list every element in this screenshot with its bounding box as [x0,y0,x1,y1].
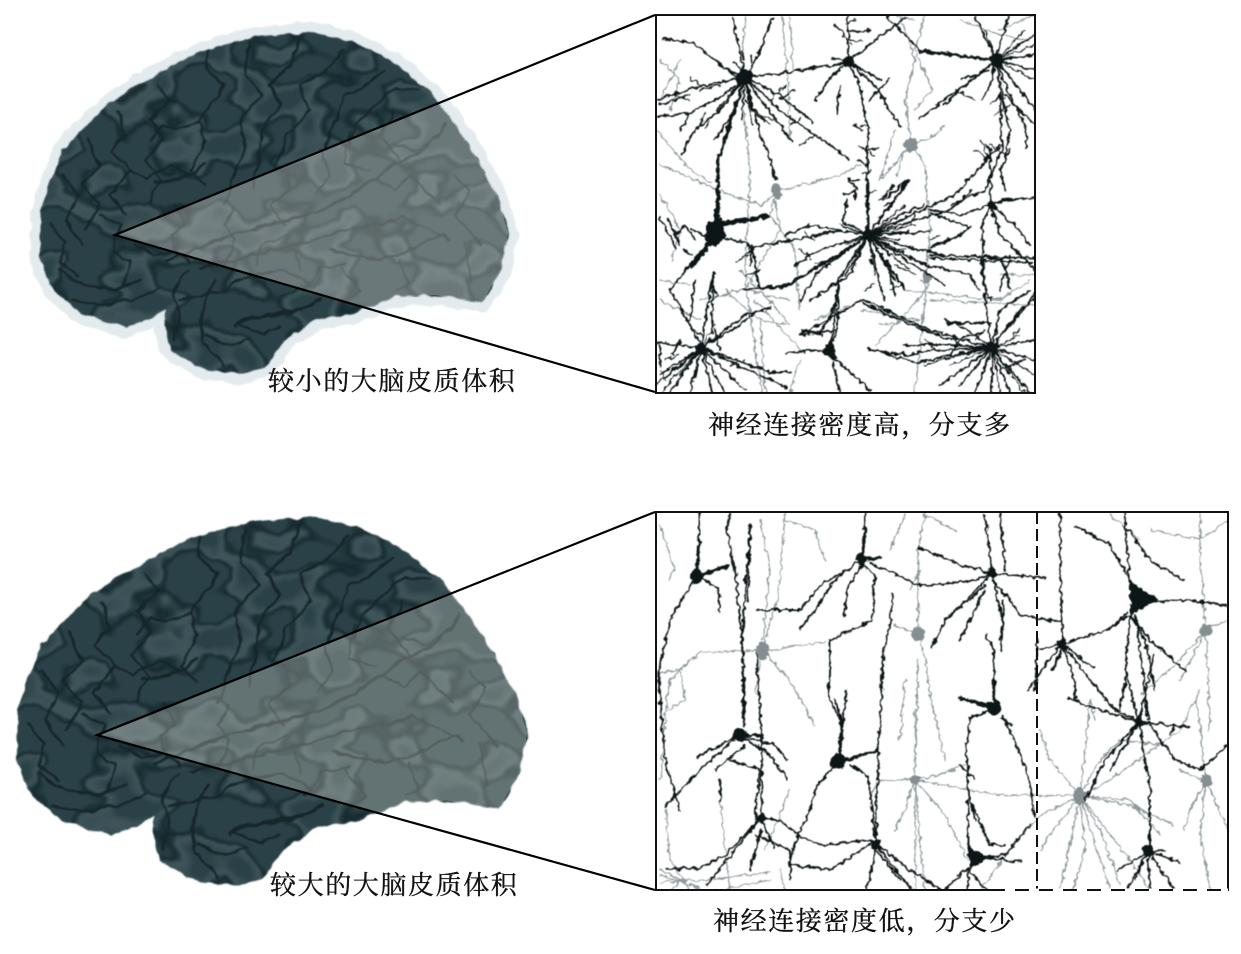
neuron top left [657,17,850,217]
neuron mid right [930,145,1035,300]
neuron lower left [656,280,790,393]
caption: sparse connections: 神经连接密度低，分支少 [713,907,1017,936]
panel frame [656,15,1035,393]
neuron pyramidal large [660,185,768,348]
panel frame [656,512,1228,890]
caption: larger cortical volume: 较大的大脑皮质体积 [270,871,518,900]
neuron centre [743,145,1033,348]
neuron top right [920,17,1035,205]
faint neuron somas [757,624,1212,804]
neuron i [960,585,1038,817]
dashed divider [1036,512,1038,890]
zoom wedge lines [97,512,655,890]
neuron e [667,655,876,886]
neuron top middle [813,16,990,198]
neuron m [1118,820,1180,895]
brain illustration [14,515,530,887]
black neurons [658,513,1228,895]
neuron h triangular [943,713,1030,895]
neuron l [1069,654,1228,844]
caption: dense connections: 神经连接密度高，分支多 [708,411,1012,440]
faint neuron somas [772,138,932,283]
panel: larger cortical volume brain [0,504,655,903]
faint background neurons [657,15,1035,393]
halo around brain [40,32,508,375]
bottom edge gaps [1005,888,1228,892]
neuron bottom right [867,260,1035,393]
brain illustration [20,20,530,390]
neuron triangular bottom [785,280,870,393]
neuron a [658,513,750,810]
highlighted wedge on brain [101,594,527,812]
neuron g [866,593,943,895]
panel: small cortical volume brain [20,15,655,392]
panel: sparse neural connections [656,512,1228,895]
neuron k triangular [1075,513,1225,720]
neuron c [919,513,1062,650]
panel: dense neural connections [656,15,1035,393]
highlighted wedge on brain [118,104,508,308]
neuron j [1028,513,1142,722]
black neurons [656,15,1035,393]
zoom wedge lines [115,15,655,392]
neuron f [789,690,877,870]
caption: small cortical volume: 较小的大脑皮质体积 [268,367,516,396]
faint background neurons [660,513,1228,895]
neuron d [665,525,787,820]
neuron b [757,513,992,720]
